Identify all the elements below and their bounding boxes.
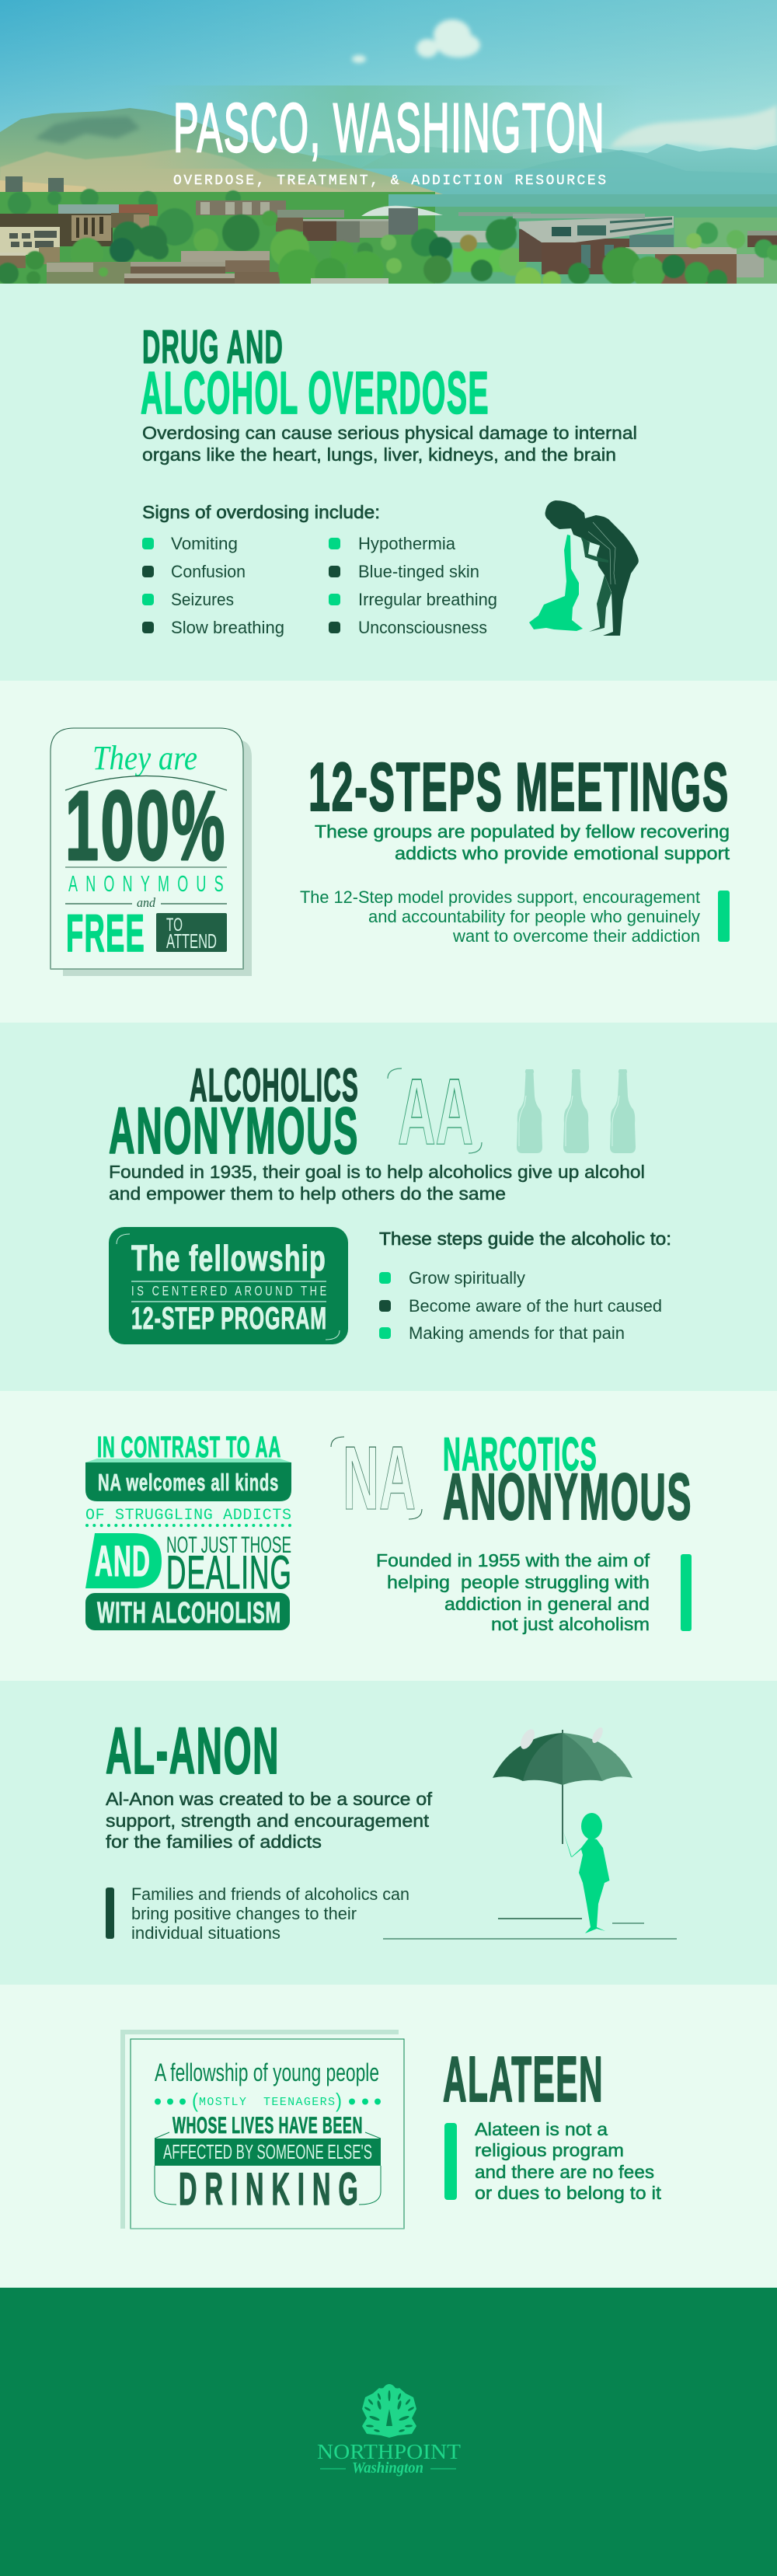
- framed quote: fellowship of young people: A fellowship of young people: [155, 2058, 379, 2086]
- stat: 100%: 100%: [65, 771, 227, 880]
- text: groups description: [315, 821, 730, 863]
- text: 12-step model: and accountability for people who genuinely: [368, 907, 700, 926]
- badge: to attend: [156, 913, 227, 953]
- buildings right: [519, 229, 542, 262]
- text: families and friends: bring positive changes to their: [131, 1904, 357, 1923]
- icon: NA outline: NA: [343, 1427, 416, 1529]
- heading: alcoholics: ALCOHOLICS: [190, 1059, 359, 1111]
- text: groups description: These groups are populated by fellow recovering: [315, 821, 730, 842]
- typographic block: in contrast to AA: WITH ALCOHOLISM: [97, 1597, 281, 1630]
- list: steps: Grow spiritually: [409, 1268, 525, 1288]
- script: and: and: [137, 895, 155, 910]
- accent bar: [444, 2123, 457, 2200]
- list: steps: Making amends for that pain: [409, 1323, 625, 1343]
- panel: alateen: [0, 1985, 777, 2288]
- text: NA description: [376, 1550, 650, 1634]
- panel: al-anon: [0, 1681, 777, 1985]
- text: groups description: addicts who provide emotional support: [395, 843, 730, 863]
- list: signs right column: Unconsciousness: [358, 618, 487, 637]
- icon: lotus: [362, 2384, 416, 2438]
- text: NA description: Founded in 1955 with the aim of: [376, 1550, 650, 1570]
- text: free: FREE: [66, 904, 145, 963]
- treeline and ground: [0, 192, 435, 284]
- list: steps: [379, 1268, 662, 1343]
- icon: person under umbrella with pills: [383, 1726, 677, 1939]
- text: families and friends: Families and friends of alcoholics can: [131, 1884, 409, 1904]
- typographic block: in contrast to AA: [85, 1431, 292, 1630]
- heading: anonymous: ANONYMOUS: [109, 1094, 359, 1167]
- hero photo: campus and mountains: [0, 0, 777, 294]
- text: NA description: addiction in general and: [444, 1594, 650, 1614]
- text: al-anon description: for the families of addicts: [106, 1832, 322, 1852]
- buildings left: [58, 204, 119, 214]
- list: steps: Become aware of the hurt caused: [409, 1296, 662, 1316]
- text: families and friends: [131, 1884, 409, 1943]
- text: alateen description: religious program: [475, 2140, 624, 2160]
- text: alateen description: or dues to belong to it: [475, 2183, 662, 2203]
- list: signs left column: Seizures: [171, 590, 234, 609]
- heading: al-anon: AL-ANON: [106, 1714, 280, 1787]
- subheading: signs: Signs of overdosing include:: [142, 502, 380, 522]
- heading: alateen: ALATEEN: [443, 2043, 604, 2115]
- badge: to attend: ATTEND: [166, 929, 217, 953]
- panel: footer: [0, 2288, 777, 2576]
- typographic block: in contrast to AA: NA welcomes all kinds: [98, 1469, 279, 1496]
- list: signs left column: Vomiting: [171, 534, 238, 553]
- text: alateen description: Alateen is not a: [475, 2119, 608, 2139]
- icon: AA outline: [388, 1058, 482, 1164]
- text: AA description: [109, 1162, 645, 1204]
- text: 12-step model: [300, 887, 700, 946]
- icon: AA outline: AA: [398, 1058, 473, 1164]
- card: 100% anonymous and free: [51, 728, 252, 976]
- script: washington: Washington: [352, 2459, 423, 2477]
- text: alateen description: [475, 2119, 662, 2203]
- typographic block: in contrast to AA: NOT JUST THOSE: [166, 1532, 291, 1558]
- text: 12-step model: The 12-Step model provides support, encouragement: [300, 887, 700, 907]
- callout: the fellowship: [109, 1227, 348, 1344]
- text: NA description: helping people struggling with: [387, 1572, 650, 1592]
- text: al-anon description: Al-Anon was created to be a source of: [106, 1789, 433, 1809]
- panel: alcoholics anonymous: [0, 1023, 777, 1391]
- list: signs left column: [142, 534, 284, 637]
- text: alateen description: and there are no fees: [475, 2162, 654, 2182]
- framed quote: fellowship of young people: AFFECTED BY SOMEONE ELSE'S: [163, 2140, 372, 2163]
- icon: three bottles: [517, 1069, 636, 1153]
- text: 12-step model: want to overcome their addiction: [452, 926, 700, 946]
- list: signs left column: Slow breathing: [171, 618, 284, 637]
- subheading: these steps: These steps guide the alcoholic to:: [379, 1229, 671, 1249]
- framed quote: fellowship of young people: DRINKING: [179, 2163, 358, 2214]
- typographic block: in contrast to AA: OF STRUGGLING ADDICTS: [85, 1507, 291, 1525]
- heading: narcotics: NARCOTICS: [443, 1428, 598, 1480]
- script: they are: They are: [92, 739, 197, 777]
- list: signs right column: Hypothermia: [358, 534, 456, 553]
- callout: the fellowship: The fellowship: [131, 1238, 326, 1278]
- list: signs right column: Blue-tinged skin: [358, 562, 479, 581]
- icon: NA outline: [331, 1427, 422, 1529]
- text: overdose description: Overdosing can cause serious physical damage to internal: [142, 423, 637, 443]
- framed quote: fellowship of young people: WHOSE LIVES HAVE BEEN: [172, 2113, 363, 2139]
- heading: drug and: DRUG AND: [142, 321, 284, 373]
- text: al-anon description: [106, 1789, 433, 1852]
- text: NA description: not just alcoholism: [491, 1614, 650, 1634]
- list: signs right column: Irregular breathing: [358, 590, 497, 609]
- callout: the fellowship: IS CENTERED AROUND THE: [131, 1284, 326, 1299]
- accent bar: [106, 1888, 114, 1939]
- typographic block: in contrast to AA: DEALING: [166, 1546, 292, 1598]
- buildings lower left roofs: [47, 262, 132, 284]
- accent bar: [718, 891, 730, 942]
- list: signs right column: [329, 534, 497, 637]
- text: overdose description: organs like the heart, lungs, liver, kidneys, and the brain: [142, 444, 616, 465]
- subtitle: OVERDOSE, TREATMENT, & ADDICTION RESOURCES: [173, 173, 606, 189]
- framed quote: fellowship of young people: (: [192, 2089, 198, 2112]
- text: al-anon description: support, strength and encouragement: [106, 1811, 430, 1831]
- panel: drug and alcohol overdose: [0, 284, 777, 681]
- logo: northpoint washington: [317, 2384, 462, 2477]
- accent bar: [681, 1554, 692, 1631]
- wordmark: northpoint: NORTHPOINT: [317, 2440, 462, 2463]
- framed quote: fellowship of young people: ): [336, 2089, 342, 2112]
- panel: 12-steps meetings: [0, 681, 777, 1023]
- text: families and friends: individual situations: [131, 1923, 280, 1943]
- framed quote: fellowship of young people: MOSTLY TEENAGERS: [199, 2096, 335, 2109]
- text: AA description: and empower them to help others do the same: [109, 1183, 506, 1204]
- badge: to attend: TO: [166, 915, 183, 936]
- buildings centre: [276, 218, 303, 232]
- panel: hero banner: [0, 0, 777, 294]
- text: AA description: Founded in 1935, their goal is to help alcoholics give up alcohol: [109, 1162, 645, 1182]
- icon: person vomiting: [529, 500, 639, 636]
- panel: narcotics anonymous: [0, 1391, 777, 1681]
- framed quote: fellowship of young people: [120, 2030, 404, 2229]
- text: overdose description: [142, 423, 637, 465]
- typographic block: in contrast to AA: IN CONTRAST TO AA: [97, 1431, 281, 1464]
- list: signs left column: Confusion: [171, 562, 246, 581]
- text: anonymous: ANONYMOUS: [68, 872, 224, 897]
- typographic block: in contrast to AA: AND: [95, 1536, 151, 1585]
- callout: the fellowship: 12-STEP PROGRAM: [131, 1302, 327, 1336]
